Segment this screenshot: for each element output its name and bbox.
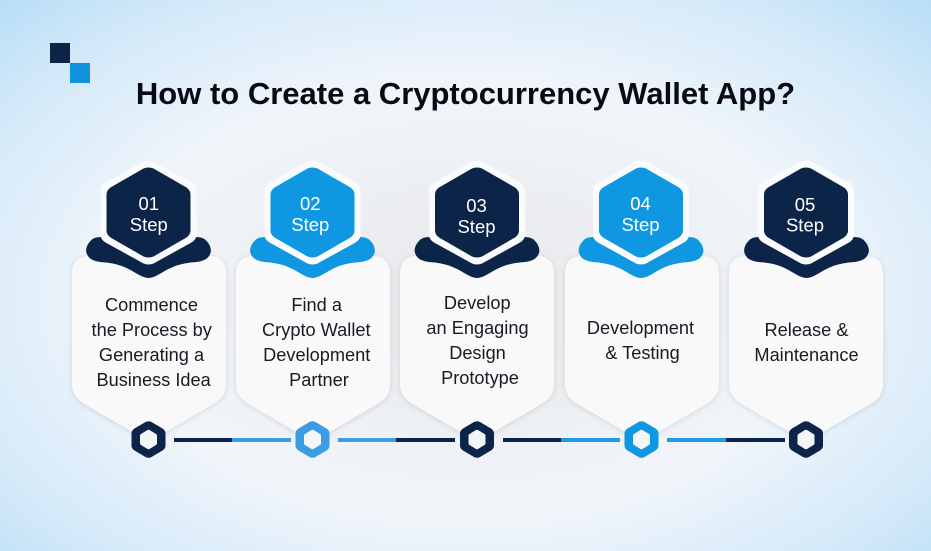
timeline node 4 <box>624 421 658 458</box>
step 3 card <box>400 256 554 439</box>
step 1 description: Generating a <box>99 345 205 365</box>
step 1 badge: Step <box>130 214 168 235</box>
timeline node 1 <box>132 421 166 458</box>
step 4 badge: Step <box>621 214 660 235</box>
step 2 description: Partner <box>289 370 349 390</box>
step 3 badge: Step <box>457 216 496 237</box>
step 2 badge <box>250 160 375 278</box>
step 3 badge <box>415 160 539 278</box>
step 3 badge: 03 <box>466 195 487 216</box>
step 2 badge: 02 <box>300 193 321 214</box>
step 2 card <box>236 256 390 439</box>
step 3 description: Prototype <box>441 368 519 388</box>
step 1 card <box>72 256 226 439</box>
step 1 badge <box>86 160 211 278</box>
step 5 card <box>729 256 883 439</box>
step 3 description: Develop <box>444 293 511 313</box>
step 2 badge: Step <box>291 214 329 235</box>
step 4 badge <box>579 160 703 278</box>
step 5 description: Release & <box>765 320 848 340</box>
step 2 description: Development <box>263 345 370 365</box>
step 5 badge: Step <box>786 214 824 236</box>
step 1 description: Commence <box>105 295 198 315</box>
step 5 badge <box>744 160 869 278</box>
step 5 description: Maintenance <box>754 345 859 365</box>
step 2 description: Find a <box>291 295 343 315</box>
step 1 description: Business Idea <box>96 370 212 390</box>
logo mark <box>50 43 90 83</box>
timeline node 5 <box>789 421 823 458</box>
step 3 description: an Engaging <box>426 318 529 338</box>
title: How to Create a Cryptocurrency Wallet App? <box>136 76 795 111</box>
step 4 description: Development <box>587 318 694 338</box>
step 1 description: the Process by <box>92 320 213 340</box>
step 4 card <box>565 256 719 439</box>
step 4 description: & Testing <box>605 343 680 363</box>
step 3 description: Design <box>449 343 506 363</box>
connector lines <box>174 438 785 442</box>
timeline node 3 <box>460 421 494 458</box>
step 4 badge: 04 <box>630 193 651 214</box>
timeline node 2 <box>296 421 330 458</box>
step 2 description: Crypto Wallet <box>262 320 371 340</box>
step 1 badge: 01 <box>139 193 159 214</box>
step 5 badge: 05 <box>795 194 815 215</box>
